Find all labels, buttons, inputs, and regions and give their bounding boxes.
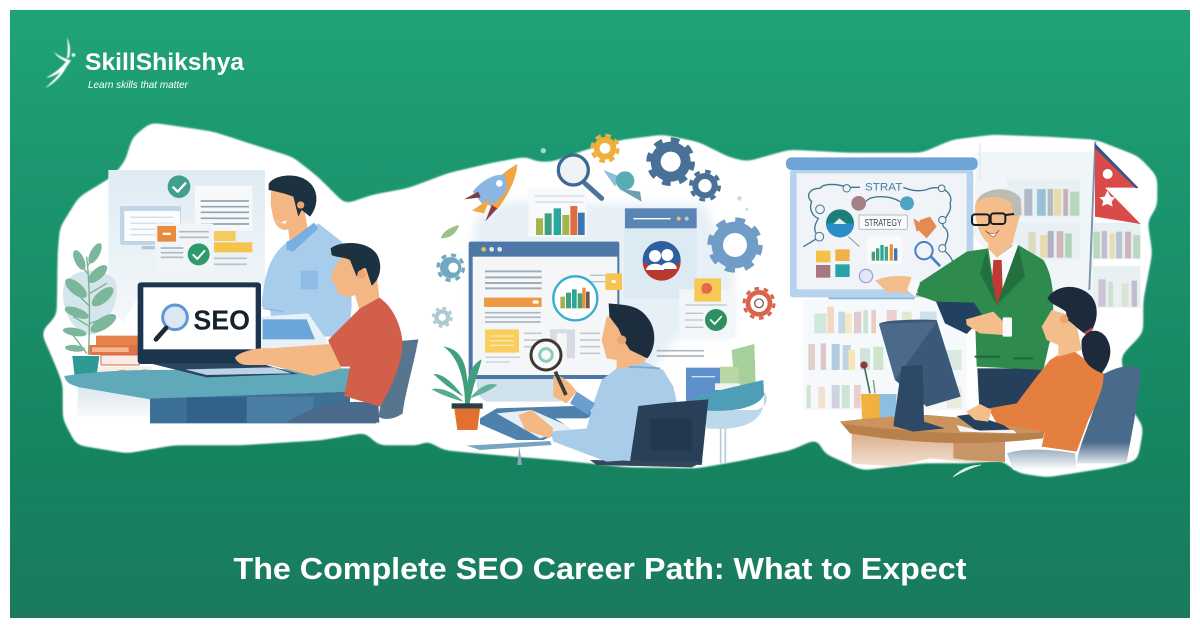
- title: The Complete SEO Career Path: What to Expect: [234, 552, 966, 586]
- man standing in blue shirt: [262, 176, 352, 337]
- icon: search magnifier: [558, 155, 602, 198]
- seated analyst: [518, 303, 708, 467]
- icon: rocket: [464, 164, 517, 221]
- flower pen cup: [860, 361, 897, 424]
- icon: magnifying glass: [156, 305, 187, 339]
- mentor in green blazer: [875, 189, 1053, 410]
- hand and phone: [957, 414, 1010, 431]
- pointing hand: [875, 276, 918, 293]
- student in orange: [957, 287, 1141, 470]
- illustration: SEO specialist analysing dashboards: [432, 135, 774, 467]
- tagline: Learn skills that matter: [88, 79, 188, 91]
- icon: teal satellite: [603, 170, 642, 202]
- icon: large dark gear: [649, 140, 693, 184]
- main browser window: [469, 242, 622, 379]
- icon: blue gear: [710, 220, 760, 270]
- small bar chart: [867, 237, 902, 264]
- icon: yellow gear: [592, 135, 618, 161]
- strategy label box: STRATEGY: [864, 218, 902, 229]
- wooden desk: [840, 415, 1045, 467]
- desktop monitor: [879, 320, 961, 432]
- browser window card: [120, 206, 181, 249]
- strategy whiteboard: [786, 157, 978, 299]
- icon: green check badge: [188, 243, 210, 265]
- search icon on board: [915, 242, 939, 265]
- magnifier in hand: [531, 340, 566, 395]
- strategy label box: [859, 215, 907, 229]
- icon: red gear: [744, 288, 774, 318]
- stack of books: [89, 336, 153, 378]
- board heading: STRAT: [865, 182, 903, 194]
- pale wall panel: [108, 170, 265, 323]
- legs: [1007, 450, 1077, 470]
- users profile panel: [624, 208, 697, 299]
- tablet: [936, 302, 983, 334]
- book rows: [1024, 189, 1140, 307]
- illustration: SEO beginner team at laptop: [62, 170, 418, 423]
- circular chart badge: [553, 276, 597, 320]
- keyboard desk: [467, 406, 597, 465]
- icon: teal check badge: [168, 175, 190, 198]
- illustration: senior mentor teaching strategy: [786, 142, 1141, 470]
- chair: [1077, 366, 1141, 463]
- yellow note bars: [214, 231, 252, 264]
- Nepal flag: [1089, 142, 1141, 290]
- content card with orange tag: [155, 223, 213, 270]
- face: [1042, 310, 1082, 357]
- note card with check: [657, 278, 735, 356]
- brand name: SkillShikshya: [85, 49, 245, 76]
- icon: dancer mark: [45, 37, 75, 88]
- chair: [630, 399, 708, 465]
- potted plant: [432, 347, 497, 430]
- hand and face: [518, 410, 553, 438]
- decorative leaf: [441, 225, 459, 238]
- small white swoosh: [953, 465, 981, 477]
- sweater: [988, 348, 1104, 452]
- plant in teal pot: [62, 241, 119, 377]
- legs: [977, 368, 1043, 410]
- blazer: [908, 245, 1053, 370]
- torso: [550, 360, 677, 462]
- head: [975, 191, 1021, 257]
- document with text lines: [195, 186, 252, 231]
- bar chart card: [528, 188, 587, 237]
- icon: small dark gear: [691, 171, 719, 200]
- desk: [64, 368, 377, 423]
- tray with folders: [686, 344, 767, 463]
- logo: [45, 37, 245, 91]
- icon: teal gear: [438, 255, 463, 280]
- flow connectors: [803, 184, 954, 270]
- glasses: [972, 213, 1014, 225]
- lower shelves with books: [803, 300, 967, 410]
- blue tablet device: [260, 313, 327, 350]
- laptop with SEO screen: [138, 282, 298, 377]
- hair: [1047, 287, 1097, 335]
- SEO label: SEO: [193, 304, 250, 335]
- icon: pale gear: [433, 308, 452, 327]
- back shelves: [973, 143, 1141, 317]
- white torn-paper illustration backdrop: [46, 127, 1153, 473]
- monitor stand: [477, 378, 563, 402]
- seated man in red shirt: [235, 243, 418, 423]
- pale background shape: [473, 200, 733, 377]
